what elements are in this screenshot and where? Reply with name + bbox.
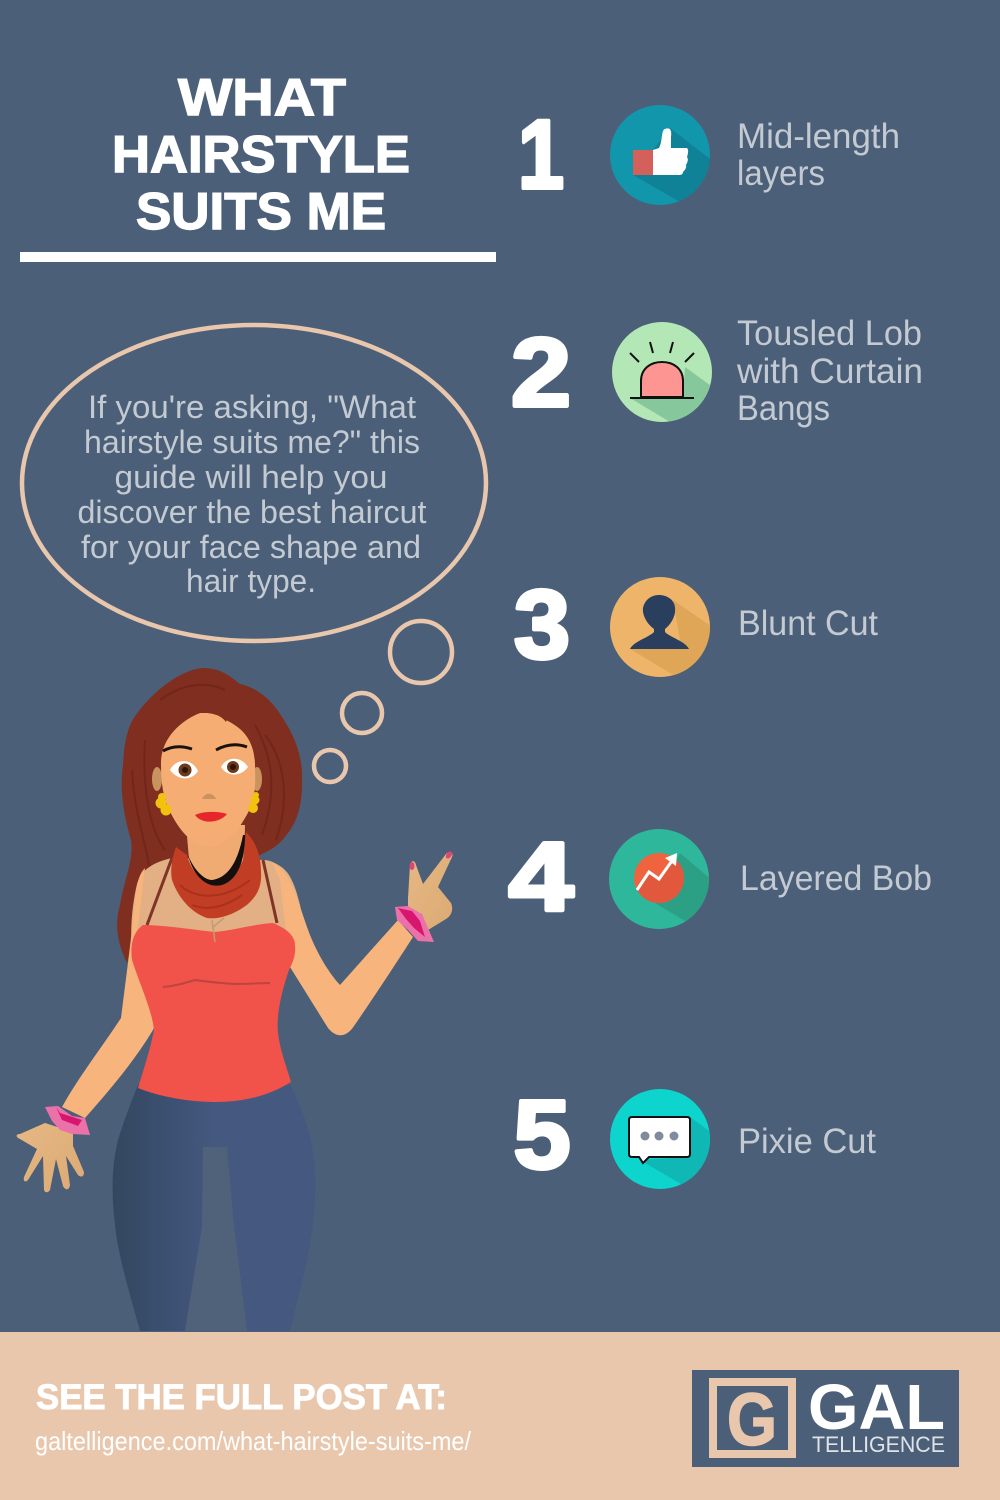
- top seam: [163, 980, 270, 987]
- neck: [186, 825, 245, 881]
- label 3: Blunt Cut: [738, 604, 878, 643]
- icon: alarm light: [612, 322, 712, 422]
- thought bubble: [22, 325, 486, 782]
- footer call to action: SEE THE FULL POST AT:: [36, 1378, 447, 1417]
- woman illustration: [17, 668, 453, 1331]
- logo: [692, 1370, 959, 1467]
- label 2: [736, 314, 923, 428]
- label 1: [737, 117, 900, 193]
- jeans: [113, 1085, 315, 1331]
- right hand: [408, 852, 453, 930]
- leg gap: [185, 1147, 247, 1331]
- red top: [131, 923, 295, 1102]
- right scrunchie: [395, 906, 434, 942]
- label 4: Layered Bob: [740, 859, 932, 898]
- left hand: [17, 1123, 84, 1192]
- front hair: [158, 692, 229, 745]
- number 5: 5: [514, 1080, 570, 1189]
- intro paragraph: for your face shape and: [81, 529, 421, 565]
- scarf folds: [180, 880, 250, 908]
- eyes and brows: [163, 745, 248, 778]
- label 1: layers: [737, 154, 825, 193]
- intro paragraph: [78, 389, 427, 599]
- hair back: [117, 668, 302, 963]
- left arm: [62, 868, 156, 1118]
- shoulders and chest: [131, 858, 303, 1000]
- footer url: galtelligence.com/what-hairstyle-suits-me/: [35, 1426, 472, 1456]
- label 5: Pixie Cut: [738, 1122, 876, 1161]
- title: [112, 69, 410, 241]
- intro paragraph: discover the best haircut: [78, 494, 427, 530]
- label 2: Bangs: [737, 389, 830, 428]
- label 2: with Curtain: [736, 352, 923, 391]
- number 1: 1: [518, 100, 564, 209]
- face: [161, 713, 255, 847]
- hair strands: [132, 685, 284, 870]
- intro paragraph: hairstyle suits me?" this: [84, 424, 420, 460]
- logo: TELLIGENCE: [812, 1432, 945, 1457]
- ears: [152, 767, 262, 791]
- scarf shadow: [188, 835, 245, 886]
- earrings: [156, 792, 260, 816]
- title: HAIRSTYLE: [112, 126, 410, 184]
- title underline: [20, 252, 496, 262]
- number 4: 4: [508, 822, 574, 931]
- number 2: 2: [511, 318, 571, 427]
- logo: GAL: [808, 1371, 945, 1443]
- number 3: 3: [514, 570, 570, 679]
- nose and lips: [195, 794, 227, 822]
- icon: growth chart: [609, 829, 709, 929]
- scarf: [171, 832, 261, 918]
- right arm: [272, 862, 413, 1035]
- label 1: Mid-length: [737, 117, 900, 156]
- title: SUITS ME: [136, 183, 386, 241]
- footer band: [0, 1332, 1000, 1500]
- intro paragraph: hair type.: [186, 563, 316, 599]
- logo: G: [727, 1378, 777, 1461]
- label 2: Tousled Lob: [737, 314, 922, 353]
- title: WHAT: [178, 69, 346, 127]
- straps and necklace: [147, 858, 277, 942]
- left scrunchie: [45, 1106, 90, 1135]
- right nails: [410, 850, 453, 870]
- icon: silhouette: [610, 577, 710, 677]
- intro paragraph: If you're asking, "What: [88, 389, 416, 425]
- icon: chat bubble: [610, 1089, 710, 1189]
- icon: thumbs up: [610, 105, 710, 205]
- intro paragraph: guide will help you: [114, 459, 388, 495]
